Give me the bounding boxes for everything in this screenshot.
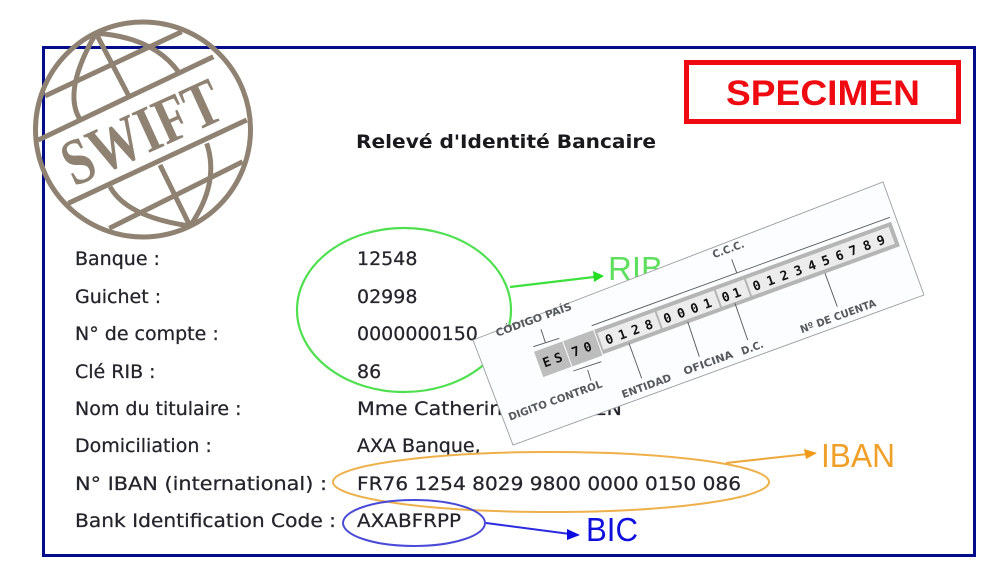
- account number strip: 0: [662, 310, 674, 327]
- account number strip: [534, 222, 900, 377]
- account number strip: S: [552, 350, 565, 367]
- account number strip: 0: [603, 332, 616, 349]
- account number strip: E: [541, 355, 553, 371]
- RIB callout: [297, 228, 663, 392]
- SWIFT globe logo: SWIFT: [50, 65, 233, 201]
- field values: [357, 248, 741, 532]
- field values: Mme Catherine LEGOUEN: [357, 398, 622, 420]
- diagram labels: ENTIDAD: [620, 372, 673, 401]
- BIC callout: [343, 500, 638, 548]
- diagram labels: CÓDIGO PAÍS: [494, 300, 574, 340]
- RIB callout: RIB: [608, 250, 663, 287]
- account number strip: 7: [847, 243, 860, 260]
- account number strip: 6: [834, 248, 846, 265]
- field labels: N° de compte :: [75, 323, 219, 345]
- diagram labels: DIGITO CONTROL: [507, 378, 604, 424]
- account number strip: 1: [731, 285, 744, 302]
- account number strip: 0: [582, 340, 594, 356]
- field labels: N° IBAN (international) :: [75, 473, 327, 495]
- field labels: Bank Identification Code :: [75, 510, 336, 532]
- field labels: Banque :: [75, 248, 160, 270]
- field labels: [75, 248, 336, 532]
- account number strip: 2: [778, 268, 791, 285]
- IBAN callout: [333, 437, 895, 512]
- specimen stamp: [686, 62, 958, 122]
- account number strip: 1: [617, 327, 629, 344]
- diagram labels: D.C.: [740, 339, 765, 358]
- field values: AXABFRPP: [357, 510, 461, 532]
- account number strip: 0: [675, 306, 688, 322]
- account number strip: 0: [689, 301, 701, 318]
- account number strip: 7: [570, 344, 582, 361]
- account number strip: 9: [875, 233, 887, 250]
- field labels: Nom du titulaire :: [75, 398, 241, 420]
- IBAN callout: IBAN: [821, 437, 895, 474]
- field labels: Guichet :: [75, 286, 161, 308]
- account number strip: 0: [720, 289, 733, 306]
- Spanish IBAN diagram card: [473, 182, 924, 445]
- SWIFT globe logo: [36, 22, 250, 237]
- account number strip: 2: [630, 322, 642, 339]
- account number strip: 5: [820, 253, 832, 270]
- account number strip: 1: [765, 273, 777, 290]
- account number strip: 0: [751, 278, 764, 295]
- specimen stamp: SPECIMEN: [726, 74, 920, 113]
- diagram leader lines: [533, 217, 890, 381]
- field labels: Domiciliation :: [75, 435, 212, 457]
- field values: FR76 1254 8029 9800 0000 0150 086: [357, 473, 741, 495]
- diagram labels: C.C.C.: [711, 239, 746, 261]
- diagram labels: OFICINA: [682, 348, 736, 378]
- field values: 12548: [357, 248, 417, 270]
- field values: 0000000150: [357, 323, 478, 345]
- account number strip: 1: [702, 296, 714, 313]
- account number strip: 3: [792, 263, 805, 280]
- field labels: Clé RIB :: [75, 361, 156, 383]
- field values: 86: [357, 361, 381, 383]
- diagram labels: Nº DE CUENTA: [799, 297, 879, 336]
- heading: Relevé d'Identité Bancaire: [356, 131, 656, 153]
- account number strip: 4: [806, 258, 819, 275]
- BIC callout: BIC: [586, 511, 638, 548]
- diagram labels: [494, 239, 879, 424]
- field values: 02998: [357, 286, 417, 308]
- account number strip: 8: [861, 238, 874, 255]
- field values: AXA Banque,: [357, 435, 481, 457]
- account number strip: 8: [643, 317, 655, 334]
